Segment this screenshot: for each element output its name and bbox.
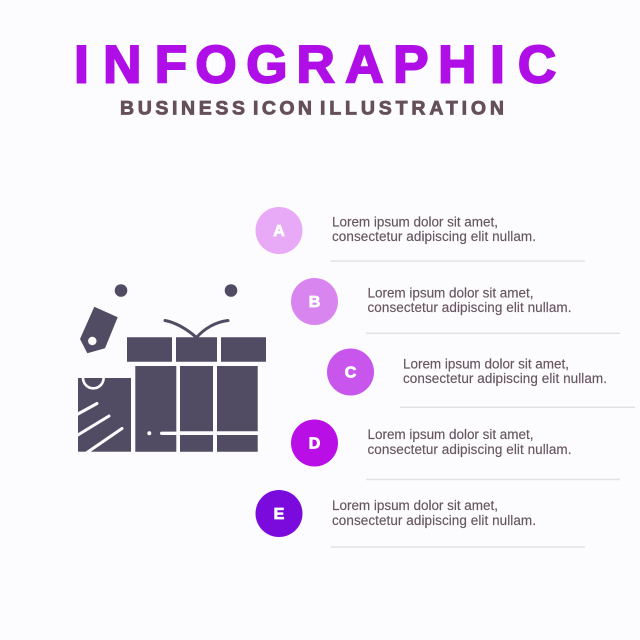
subtitle: ILLUSTRATION [320, 98, 504, 120]
icon: gift lid [127, 337, 266, 362]
item D [291, 420, 620, 480]
item D: consectetur adipiscing elit nullam. [368, 442, 572, 457]
item C [327, 348, 635, 408]
item D: D [309, 436, 320, 452]
subtitle: ICON [253, 98, 312, 120]
item B [291, 278, 620, 334]
icon: gift box [135, 366, 258, 452]
item A: Lorem ipsum dolor sit amet, [332, 214, 498, 230]
item E: consectetur adipiscing elit nullam. [332, 513, 536, 528]
item D: Lorem ipsum dolor sit amet, [368, 427, 534, 442]
icon: right dot [225, 284, 237, 297]
icon: ribbon bow [165, 320, 228, 338]
subtitle: BUSINESS [120, 98, 245, 120]
icon: price tag [80, 307, 118, 353]
item B: B [309, 294, 320, 311]
icon: box dash and dot [147, 431, 177, 435]
item A: consectetur adipiscing elit nullam. [332, 229, 536, 244]
item E [256, 490, 585, 548]
title: INFOGRAPHIC [74, 36, 556, 94]
icon: left dot [115, 284, 127, 297]
item B: consectetur adipiscing elit nullam. [368, 300, 572, 315]
item C: consectetur adipiscing elit nullam. [403, 371, 607, 386]
item A: A [273, 223, 285, 240]
item B: Lorem ipsum dolor sit amet, [368, 286, 534, 300]
item C: C [345, 364, 357, 382]
item A [256, 207, 585, 262]
icon: shopping bag [77, 378, 131, 452]
subtitle [120, 98, 504, 120]
item C: Lorem ipsum dolor sit amet, [403, 356, 569, 372]
item E: Lorem ipsum dolor sit amet, [332, 498, 498, 513]
item E: E [274, 506, 285, 523]
icon: gifts, bag and price tag [77, 284, 266, 452]
